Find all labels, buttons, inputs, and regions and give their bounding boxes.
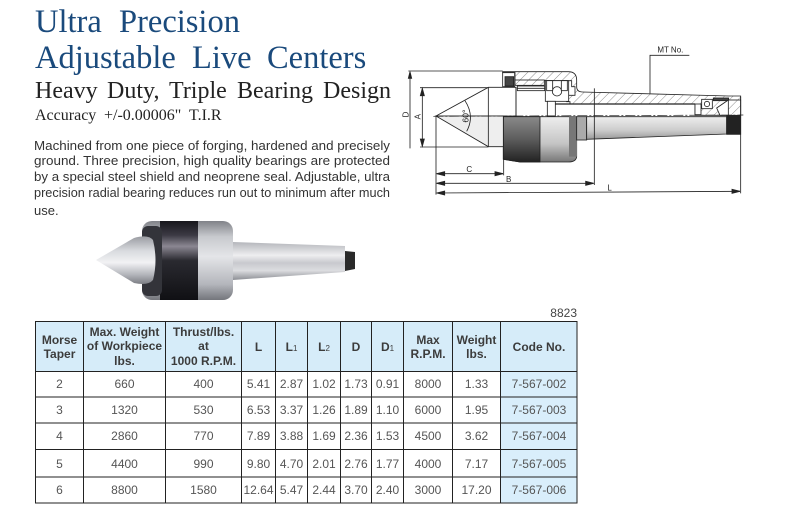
dimension A: [414, 88, 488, 147]
subtitle: Bearing: [237, 78, 313, 104]
table row: Morse taper 6: 17.20: [461, 483, 492, 497]
table row: Morse taper 3: 1.10: [376, 403, 400, 417]
table row: Morse taper 5: 2.76: [344, 457, 368, 471]
table header labels: Taper: [44, 347, 76, 361]
description text: Machined from one piece of forging, hardened and precisely: [34, 138, 390, 153]
dimension D: [402, 71, 503, 148]
table row: Morse taper 6: 2.44: [312, 483, 336, 497]
code column background: [500, 371, 577, 503]
table row: Morse taper 5: 7.17: [465, 457, 489, 471]
table row: Morse taper 3: 1.89: [344, 403, 368, 417]
table row: Morse taper 5: 4000: [415, 457, 442, 471]
table header labels: L2: [318, 340, 330, 354]
table row: Morse taper 4: 2860: [111, 429, 138, 443]
table row: Morse taper 3: [56, 403, 567, 417]
subtitle: Duty,: [107, 78, 159, 104]
table row: Morse taper 5: 7-567-005: [512, 457, 567, 471]
table header labels: 1000 R.P.M.: [171, 354, 236, 368]
table row: Morse taper 3: 1320: [111, 403, 138, 417]
table header labels: L: [255, 340, 262, 354]
table row: Morse taper 3: 3: [56, 403, 63, 417]
table row: Morse taper 3: 1.26: [312, 403, 336, 417]
MT No. callout: [650, 46, 689, 93]
table row: Morse taper 3: 3.37: [280, 403, 304, 417]
dimension B: [437, 88, 594, 185]
lower half: shaded body: [488, 116, 741, 162]
table row: Morse taper 2: 1.33: [465, 377, 489, 391]
table row: Morse taper 6: 8800: [111, 483, 138, 497]
table row: Morse taper 3: 530: [193, 403, 214, 417]
table row: Morse taper 4: 1.69: [312, 429, 336, 443]
title: [35, 4, 366, 76]
table row: Morse taper 5: 990: [193, 457, 214, 471]
table row: Morse taper 2: 1.02: [312, 377, 336, 391]
dimension C: [436, 116, 504, 195]
table row: Morse taper 2: 660: [114, 377, 135, 391]
table row: Morse taper 5: [56, 457, 567, 471]
angle label 60 degrees: [460, 101, 470, 131]
subtitle: Triple: [169, 78, 227, 104]
table header labels: Morse: [42, 333, 77, 347]
table row: Morse taper 2: 400: [193, 377, 214, 391]
table header labels: of Workpiece: [87, 339, 162, 353]
table row: Morse taper 2: [56, 377, 567, 391]
table row: Morse taper 4: 3.88: [280, 429, 304, 443]
dimension C: C: [466, 165, 472, 174]
table row: Morse taper 3: 1.95: [465, 403, 489, 417]
table header labels: D: [352, 340, 361, 354]
specification table: [36, 321, 577, 503]
dimension A: A: [414, 113, 423, 119]
table row: Morse taper 4: 770: [193, 429, 214, 443]
table row: Morse taper 6: [56, 483, 567, 497]
table row: Morse taper 6: 3000: [415, 483, 442, 497]
subtitle: [35, 78, 391, 104]
subtitle: Heavy: [35, 78, 98, 104]
upper half: hatched section: [503, 72, 741, 116]
table row: Morse taper 5: 1.77: [376, 457, 400, 471]
dimension D: D: [402, 111, 411, 117]
table header labels: R.P.M.: [410, 347, 446, 361]
table row: Morse taper 5: 4400: [111, 457, 138, 471]
grid lines: [36, 321, 577, 503]
table row: Morse taper 4: 7-567-004: [512, 429, 567, 443]
table header background: [36, 321, 577, 371]
title: Adjustable: [35, 40, 176, 76]
table row: Morse taper 6: 5.47: [280, 483, 304, 497]
table row: Morse taper 6: 6: [56, 483, 63, 497]
table header labels: Max: [416, 333, 440, 347]
MT No. callout: MT No.: [657, 46, 683, 55]
cone point: [436, 87, 516, 147]
table row: Morse taper 4: [56, 429, 567, 443]
table row: Morse taper 2: 0.91: [376, 377, 400, 391]
table row: Morse taper 6: 3.70: [344, 483, 368, 497]
product photo: live center: [96, 221, 355, 300]
description text: ground. Three precision, high quality bearings are protected: [34, 153, 390, 168]
table row: Morse taper 6: 1580: [190, 483, 217, 497]
table row: Morse taper 2: 8000: [415, 377, 442, 391]
technical drawing: [402, 46, 743, 195]
title: Precision: [119, 4, 240, 40]
table row: Morse taper 2: 2: [56, 377, 63, 391]
title: Ultra: [35, 4, 102, 40]
table row: Morse taper 2: 2.87: [280, 377, 304, 391]
dimension B: B: [506, 175, 511, 184]
table header labels: Weight: [457, 333, 496, 347]
table row: Morse taper 6: 12.64: [243, 483, 274, 497]
table row: Morse taper 4: 7.89: [247, 429, 271, 443]
table row: Morse taper 3: 6.53: [247, 403, 271, 417]
accuracy note: +/-0.00006": [104, 107, 181, 124]
centerline: [433, 115, 743, 116]
accuracy note: T.I.R: [189, 107, 222, 124]
table header labels: at: [198, 339, 209, 353]
table row: Morse taper 2: 5.41: [247, 377, 271, 391]
title: Live: [192, 40, 252, 76]
angle label 60 degrees: 60°: [460, 110, 470, 123]
table row: Morse taper 3: 6000: [415, 403, 442, 417]
table header labels: Max. Weight: [90, 325, 159, 339]
table header labels: Thrust/lbs.: [173, 325, 234, 339]
description text: by a special steel shield and neoprene seal. Adjustable, ultra: [34, 169, 391, 184]
accuracy note: Accuracy: [35, 107, 96, 124]
description text: [34, 138, 391, 218]
accuracy note: [35, 107, 222, 124]
table header labels: L1: [286, 340, 298, 354]
table row: Morse taper 4: 3.62: [465, 429, 489, 443]
table row: Morse taper 5: 5: [56, 457, 63, 471]
table row: Morse taper 5: 4.70: [280, 457, 304, 471]
table row: Morse taper 2: 7-567-002: [512, 377, 567, 391]
table header labels: [42, 325, 565, 368]
subtitle: Design: [323, 78, 391, 104]
table header labels: lbs.: [114, 354, 135, 368]
dimension L: [437, 97, 741, 195]
table row: Morse taper 6: 7-567-006: [512, 483, 567, 497]
title: Centers: [267, 40, 366, 76]
table row: Morse taper 4: 2.36: [344, 429, 368, 443]
table header labels: D1: [381, 340, 395, 354]
table row: Morse taper 4: 1.53: [376, 429, 400, 443]
table row: Morse taper 5: 2.01: [312, 457, 336, 471]
description text: use.: [34, 203, 59, 218]
table header labels: Code No.: [513, 340, 565, 354]
description text: precision radial bearing reduces run out to minimum after much: [34, 185, 390, 200]
table header labels: lbs.: [466, 347, 487, 361]
dimension L: L: [607, 184, 612, 193]
table row: Morse taper 6: 2.40: [376, 483, 400, 497]
table row: Morse taper 5: 9.80: [247, 457, 271, 471]
table row: Morse taper 3: 7-567-003: [512, 403, 567, 417]
table reference number: 8823: [550, 306, 577, 320]
table row: Morse taper 2: 1.73: [344, 377, 368, 391]
table row: Morse taper 4: 4: [56, 429, 63, 443]
table row: Morse taper 4: 4500: [415, 429, 442, 443]
